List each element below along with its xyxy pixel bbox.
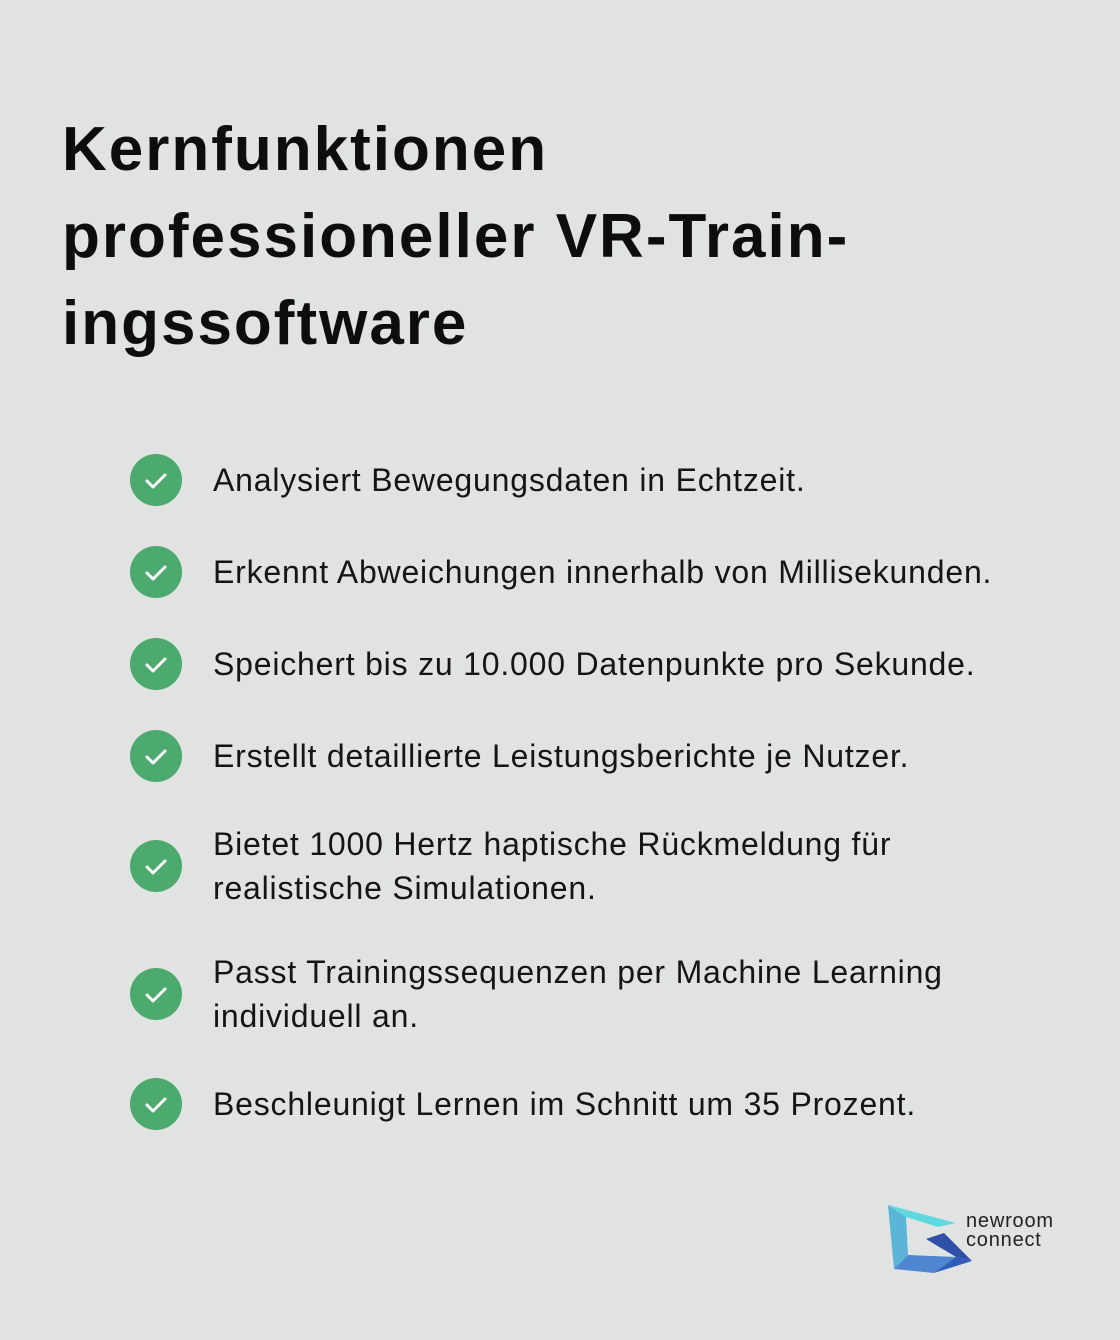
item 4 [130, 730, 909, 782]
title: Kernfunktionen [62, 115, 548, 184]
item 1: Analysiert Bewegungsdaten in Echtzeit. [213, 462, 806, 498]
logo text [966, 1210, 1054, 1251]
item 4: Erstellt detaillierte Leistungsberichte je Nutzer. [213, 738, 909, 774]
item 6: Passt Trainingssequenzen per Machine Learning [213, 954, 943, 990]
item 7 [130, 1078, 916, 1130]
title: ingssoftware [62, 289, 468, 358]
item 5: realistische Simulationen. [213, 870, 597, 906]
title [62, 115, 849, 358]
logo text: newroom [966, 1210, 1054, 1232]
logo icon [888, 1205, 972, 1273]
item 3: Speichert bis zu 10.000 Datenpunkte pro Sekunde. [213, 646, 975, 682]
item 5 [130, 826, 891, 906]
title: professioneller VR-Train- [62, 202, 849, 271]
item 2 [130, 546, 992, 598]
item 1 [130, 454, 806, 506]
item 6 [130, 954, 943, 1034]
item 3 [130, 638, 975, 690]
item 2: Erkennt Abweichungen innerhalb von Millisekunden. [213, 554, 992, 590]
logo [888, 1205, 1054, 1273]
item 5: Bietet 1000 Hertz haptische Rückmeldung für [213, 826, 891, 862]
item 7: Beschleunigt Lernen im Schnitt um 35 Prozent. [213, 1086, 916, 1122]
logo text: connect [966, 1229, 1042, 1251]
item 6: individuell an. [213, 998, 419, 1034]
